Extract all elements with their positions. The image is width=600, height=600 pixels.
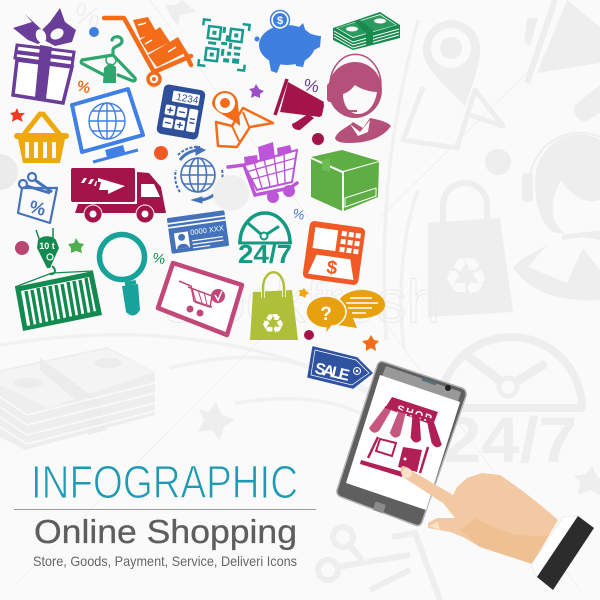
icon: green star (68, 238, 84, 253)
icon: coupon with scissors: % (27, 196, 48, 220)
icon: recycle shopping bag: ♻ (261, 309, 285, 340)
icon: hand trolley with boxes (104, 17, 191, 85)
icon: support agent (327, 54, 391, 143)
shop icon on phone screen (360, 397, 442, 477)
jacket sleeve (537, 516, 594, 590)
icon: speech bubbles (306, 290, 385, 335)
watermark: top star (165, 0, 197, 26)
icon: small maroon dot (304, 330, 314, 340)
icon: percent purple: % (302, 75, 320, 97)
icon: percent blue: % (291, 205, 307, 223)
icon: piggy bank (254, 10, 321, 73)
icon: percent green: % (151, 249, 167, 267)
icon: crane hook with weight: 10 t (39, 241, 55, 251)
icon: speech bubbles: ? (320, 304, 332, 325)
icon: credit card (167, 210, 229, 254)
icon: ATM terminal: $ (325, 257, 339, 280)
icon: tablet with cart (158, 263, 242, 335)
icon: credit card: 0000 XXX (190, 223, 224, 237)
icon: map pin (212, 91, 273, 147)
title: INFOGRAPHIC (31, 456, 298, 508)
icon: coupon with scissors (18, 173, 57, 223)
icon: shopping basket (14, 114, 69, 163)
caption: Store, Goods, Payment, Service, Deliveri Icons (33, 553, 297, 569)
icon: monitor with globe (72, 89, 143, 162)
icon: maroon dot (312, 133, 324, 145)
shop icon on phone screen: SHOP (395, 403, 433, 425)
watermark: stock lettering: stockfresh (165, 268, 440, 335)
icon: megaphone (275, 79, 324, 130)
icon: stack of banknotes (333, 12, 400, 50)
smartphone (337, 362, 466, 526)
watermark: shopping bag (428, 183, 513, 317)
watermark: clock 24/7 (440, 337, 582, 476)
watermark: clock 24/7: 24/7 (443, 404, 577, 476)
icon: grey circle centre (213, 175, 249, 211)
icon: amber star (299, 288, 309, 298)
watermark: star (198, 402, 235, 440)
icon: mauve dot (15, 241, 29, 255)
icon: clock 24/7 (238, 213, 292, 269)
icon: sale tag (308, 347, 372, 388)
icon: percent orange: % (75, 77, 92, 97)
icon: orange star (362, 335, 379, 351)
icon: clock 24/7: 24/7 (238, 239, 292, 269)
watermark: megaphone (524, 0, 600, 122)
icon: piggy bank: $ (277, 15, 283, 27)
watermark: shopping bag: ♻ (443, 248, 489, 308)
icon: orange dot (154, 146, 168, 160)
subtitle: Online Shopping (34, 513, 297, 550)
icon: ATM terminal (302, 220, 366, 286)
icon: sale tag: SALE (313, 360, 351, 385)
icon: large grey circle (0, 154, 18, 190)
icon: magnifying glass (100, 234, 144, 316)
shirt cuff (531, 516, 578, 577)
watermark: dot (485, 149, 511, 175)
icon: blue dot (89, 27, 99, 37)
icon: calculator: 1234 (175, 92, 199, 107)
watermark: small star right (574, 466, 600, 495)
icon: calculator (156, 84, 206, 140)
divider (14, 508, 316, 510)
watermark: location pin and map (403, 20, 503, 148)
icon: shipping container (15, 271, 102, 331)
watermark: cash stack (0, 347, 155, 450)
icon: globe with arrows (175, 146, 223, 203)
icon: crane hook with weight (36, 228, 59, 274)
watermark: support agent (513, 133, 600, 300)
icon: clothes hanger with tag (81, 37, 135, 83)
icon: delivery truck (71, 168, 166, 223)
icon: recycle shopping bag (250, 272, 298, 340)
watermark: coupon and scissors (318, 527, 440, 600)
icon: gift box (13, 8, 76, 103)
icon: purple shopping cart (228, 142, 297, 203)
icon: cardboard box (311, 150, 379, 211)
icon: QR code (198, 19, 250, 71)
hand pointing at phone (401, 466, 594, 590)
icon: purple star (249, 84, 264, 98)
icon: red star (10, 108, 25, 122)
